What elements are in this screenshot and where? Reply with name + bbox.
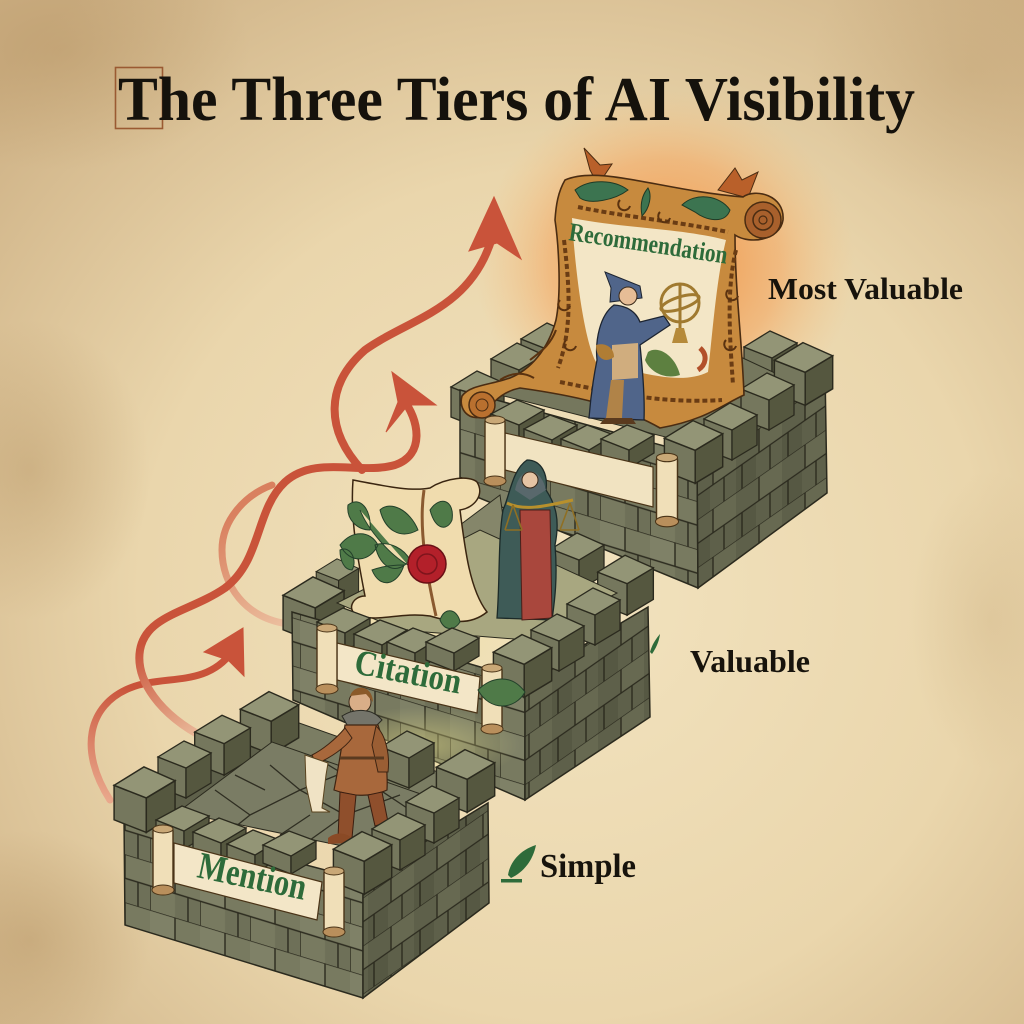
mention banner: Mention bbox=[194, 845, 310, 909]
tier 2 tower: citation bbox=[283, 460, 653, 800]
inner walls bbox=[165, 712, 455, 815]
tower floor bbox=[500, 310, 790, 445]
front battlements bbox=[156, 786, 459, 894]
illuminated scroll bbox=[461, 148, 783, 428]
right battlements bbox=[741, 343, 833, 430]
citation banner bbox=[316, 624, 525, 734]
label: simple: Simple bbox=[540, 848, 636, 885]
scroll title: recommendation: Recommendation bbox=[567, 217, 730, 270]
front battlements bbox=[317, 588, 620, 697]
mention banner bbox=[152, 825, 345, 937]
tower faces bbox=[292, 607, 650, 800]
arrow: faded swirl bbox=[222, 485, 288, 624]
empty banner bbox=[484, 416, 679, 527]
tower floor bbox=[337, 530, 617, 640]
citation banner: Citation bbox=[351, 642, 465, 701]
label: valuable: Valuable bbox=[690, 643, 810, 679]
tower floor with flagstones bbox=[178, 742, 455, 850]
arrow: citation to recommendation bbox=[139, 372, 436, 738]
figure: judge with scales bbox=[497, 460, 579, 620]
figure: astronomer bbox=[589, 272, 701, 424]
arrow: rising to top bbox=[335, 197, 521, 470]
label: most valuable: Most Valuable bbox=[768, 271, 963, 306]
tower faces bbox=[460, 370, 827, 588]
icon: small quill at citation tier bbox=[650, 634, 660, 654]
back battlements bbox=[158, 692, 495, 812]
arrow: mention to citation bbox=[91, 628, 244, 800]
growth arrows bbox=[91, 197, 521, 800]
icon: quill bbox=[501, 845, 536, 882]
figure: messenger with scroll bbox=[305, 688, 388, 844]
tower faces bbox=[124, 803, 489, 998]
back wall bricks bbox=[283, 495, 653, 642]
back battlements bbox=[451, 323, 797, 428]
front battlements bbox=[491, 400, 757, 483]
sealed scroll bbox=[340, 478, 487, 628]
title: The Three Tiers of AI Visibility bbox=[118, 66, 915, 134]
tier 1 tower: mention bbox=[114, 688, 495, 998]
left corner merlon bbox=[114, 767, 175, 832]
tier 3 tower: recommendation bbox=[451, 148, 833, 588]
